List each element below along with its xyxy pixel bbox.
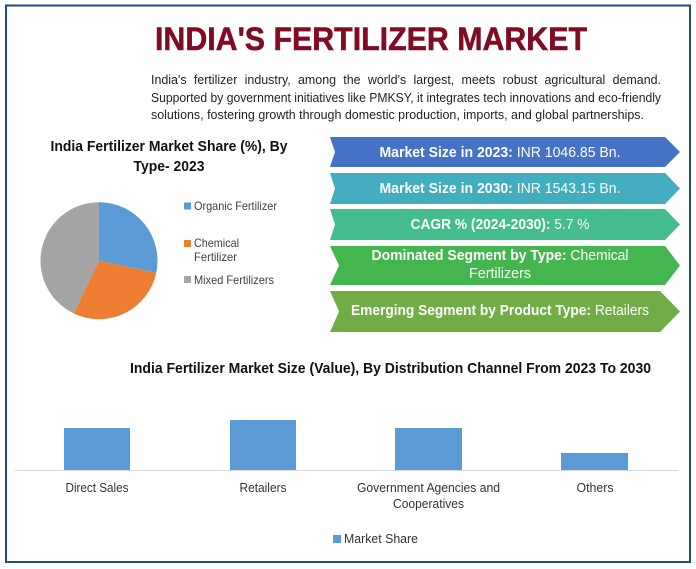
intro paragraph: Supported by government initiatives like PMKSY, it integrates tech innovations and eco-friendly [151,90,661,105]
legend: mixed fertilizers: Mixed Fertilizers [194,273,274,287]
bar axis labels: Retailers [240,481,286,495]
banner: dominated segment: Dominated Segment by Type: Chemical [372,248,628,264]
slice: mixed fertilizers [40,202,99,313]
title: INDIA'S FERTILIZER MARKET [155,21,587,57]
banner: CAGR [330,209,680,240]
bar axis labels: Cooperatives [393,497,464,511]
banner: dominated segment: Fertilizers [469,266,531,282]
pie chart heading: Type- 2023 [134,158,204,175]
banner: emerging segment: Emerging Segment by Product Type: Retailers [351,303,649,319]
bar: government agencies and cooperatives [395,428,462,470]
bar: direct sales [64,428,130,470]
banner: market size 2030 [330,173,680,204]
legend: chemical fertilizer: Fertilizer [194,250,237,264]
banner: market size 2023: Market Size in 2023: INR 1046.85 Bn. [380,145,620,161]
banner: emerging segment [330,291,680,332]
slice: chemical fertilizer [74,261,156,319]
pie chart [40,202,157,319]
banner: market size 2023 [330,137,680,167]
legend: organic fertilizer: Organic Fertilizer [194,199,277,213]
intro paragraph: solutions, fostering growth through domestic production, imports, and global partnerships. [151,107,644,122]
banner: CAGR: CAGR % (2024-2030): 5.7 % [410,217,590,233]
intro paragraph [151,72,661,122]
banner: dominated segment [330,246,680,285]
slice: organic fertilizer [99,202,157,273]
pie legend [184,199,277,287]
pie chart heading: India Fertilizer Market Share (%), By [50,138,288,155]
legend: chemical fertilizer [184,236,239,264]
bar axis labels [66,481,614,511]
bar axis labels: Direct Sales [66,481,128,495]
intro paragraph: India's fertilizer industry, among the world's largest, meets robust agricultural demand. [151,72,661,87]
bar chart [15,420,678,470]
pie chart heading [50,138,288,175]
legend: chemical fertilizer: Chemical [194,236,239,250]
banner: market size 2030: Market Size in 2030: INR 1543.15 Bn. [380,181,620,197]
bar: retailers [230,420,296,470]
bar axis labels: Others [576,481,614,495]
bar: others [561,453,628,470]
bar chart heading: India Fertilizer Market Size (Value), By Distribution Channel From 2023 To 2030 [130,360,651,377]
bar legend: Market Share [344,532,418,546]
bar axis labels: Government Agencies and [357,481,500,495]
